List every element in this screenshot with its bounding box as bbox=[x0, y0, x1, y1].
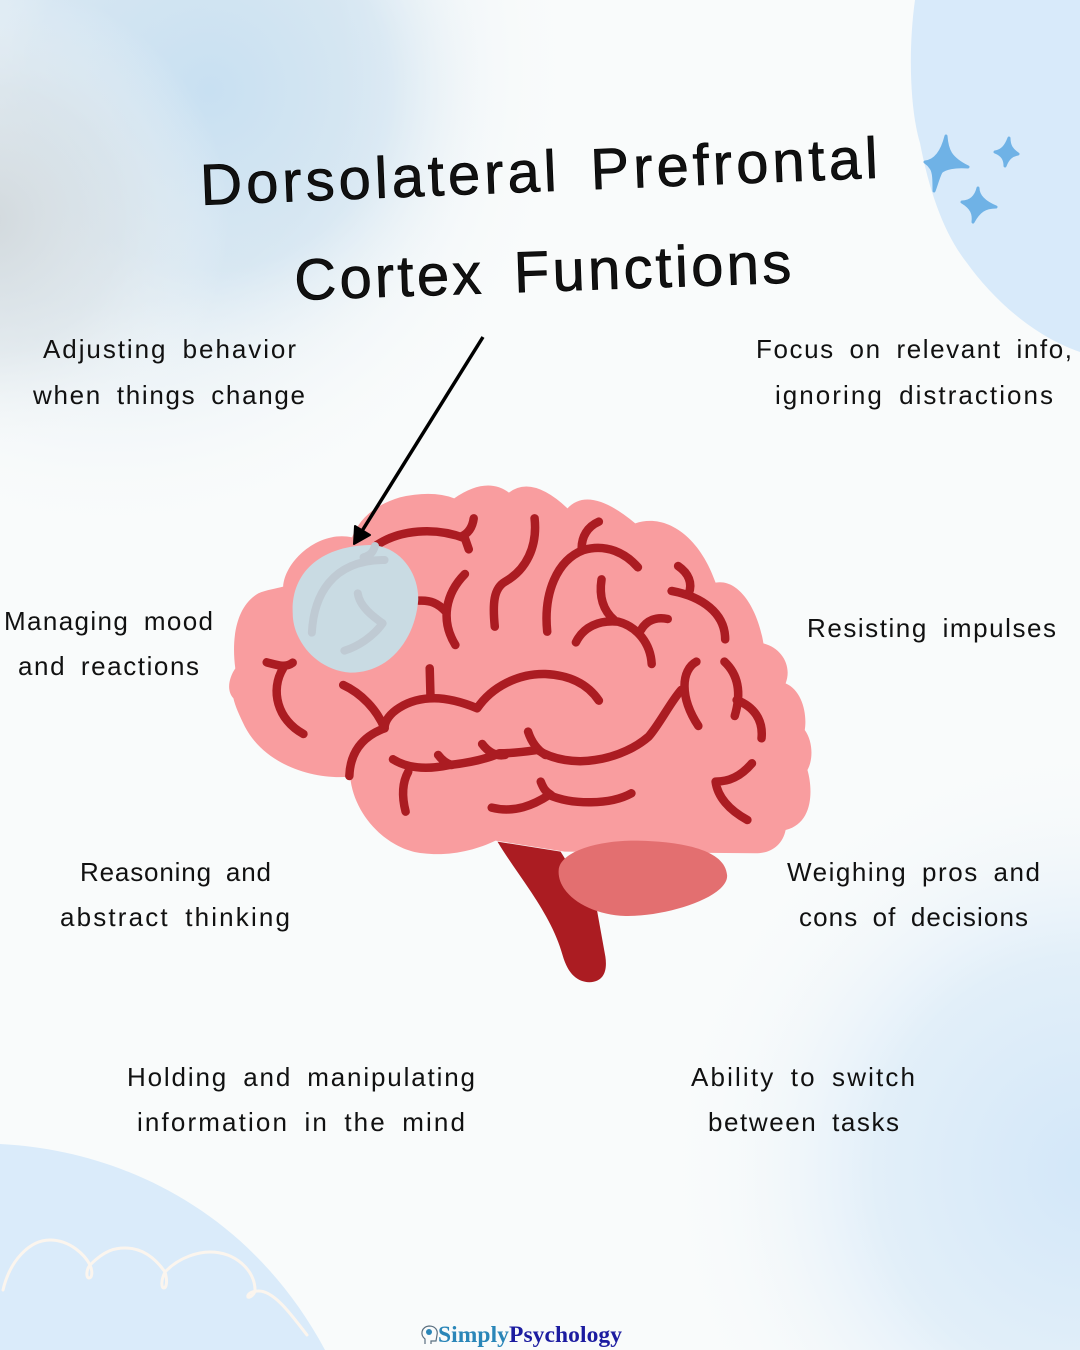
brain illustration bbox=[229, 486, 811, 982]
cerebellum bbox=[559, 841, 727, 916]
title: Dorsolateral Prefrontal bbox=[199, 126, 879, 218]
icon: head bbox=[422, 1326, 437, 1344]
brain stem bbox=[497, 842, 606, 982]
arrow pointing to the highlighted region bbox=[354, 337, 483, 544]
label: adjusting behavior: Adjusting behavior bbox=[43, 334, 296, 364]
label: adjusting behavior: when things change bbox=[32, 380, 305, 410]
icon: sparkles bbox=[925, 136, 1018, 222]
label: weighing pros and cons: cons of decisions bbox=[799, 902, 1028, 932]
title: Cortex Functions bbox=[293, 231, 792, 313]
label: managing mood bbox=[4, 606, 213, 681]
label: switching tasks bbox=[691, 1062, 915, 1137]
label: focus on relevant info: ignoring distractions bbox=[775, 380, 1053, 410]
label: switching tasks: Ability to switch bbox=[691, 1062, 915, 1092]
label: weighing pros and cons: Weighing pros and bbox=[787, 857, 1040, 887]
logo: SimplyPsychology bbox=[438, 1322, 622, 1348]
brain outline bbox=[229, 486, 811, 854]
label: managing mood: Managing mood bbox=[4, 606, 213, 636]
cloud outline doodle bbox=[3, 1240, 307, 1335]
corner shape: top right bbox=[911, 0, 1080, 352]
brain folds bbox=[267, 518, 762, 820]
label: managing mood: and reactions bbox=[18, 651, 199, 681]
label: holding information: information in the mind bbox=[137, 1107, 465, 1137]
label: reasoning: abstract thinking bbox=[60, 902, 290, 932]
label: adjusting behavior bbox=[32, 334, 305, 410]
highlighted dorsolateral prefrontal region bbox=[293, 545, 418, 673]
label: switching tasks: between tasks bbox=[708, 1107, 899, 1137]
label: holding information: Holding and manipulating bbox=[127, 1062, 475, 1092]
label: reasoning: Reasoning and bbox=[80, 857, 271, 887]
label: focus on relevant info bbox=[756, 334, 1072, 410]
title bbox=[199, 126, 879, 313]
label: holding information bbox=[127, 1062, 475, 1137]
label: weighing pros and cons bbox=[787, 857, 1040, 932]
label: reasoning bbox=[60, 857, 290, 932]
label: resisting impulses: Resisting impulses bbox=[807, 613, 1056, 643]
label: focus on relevant info: Focus on relevant info, bbox=[756, 334, 1072, 364]
corner shape: bottom left bbox=[0, 1144, 325, 1350]
